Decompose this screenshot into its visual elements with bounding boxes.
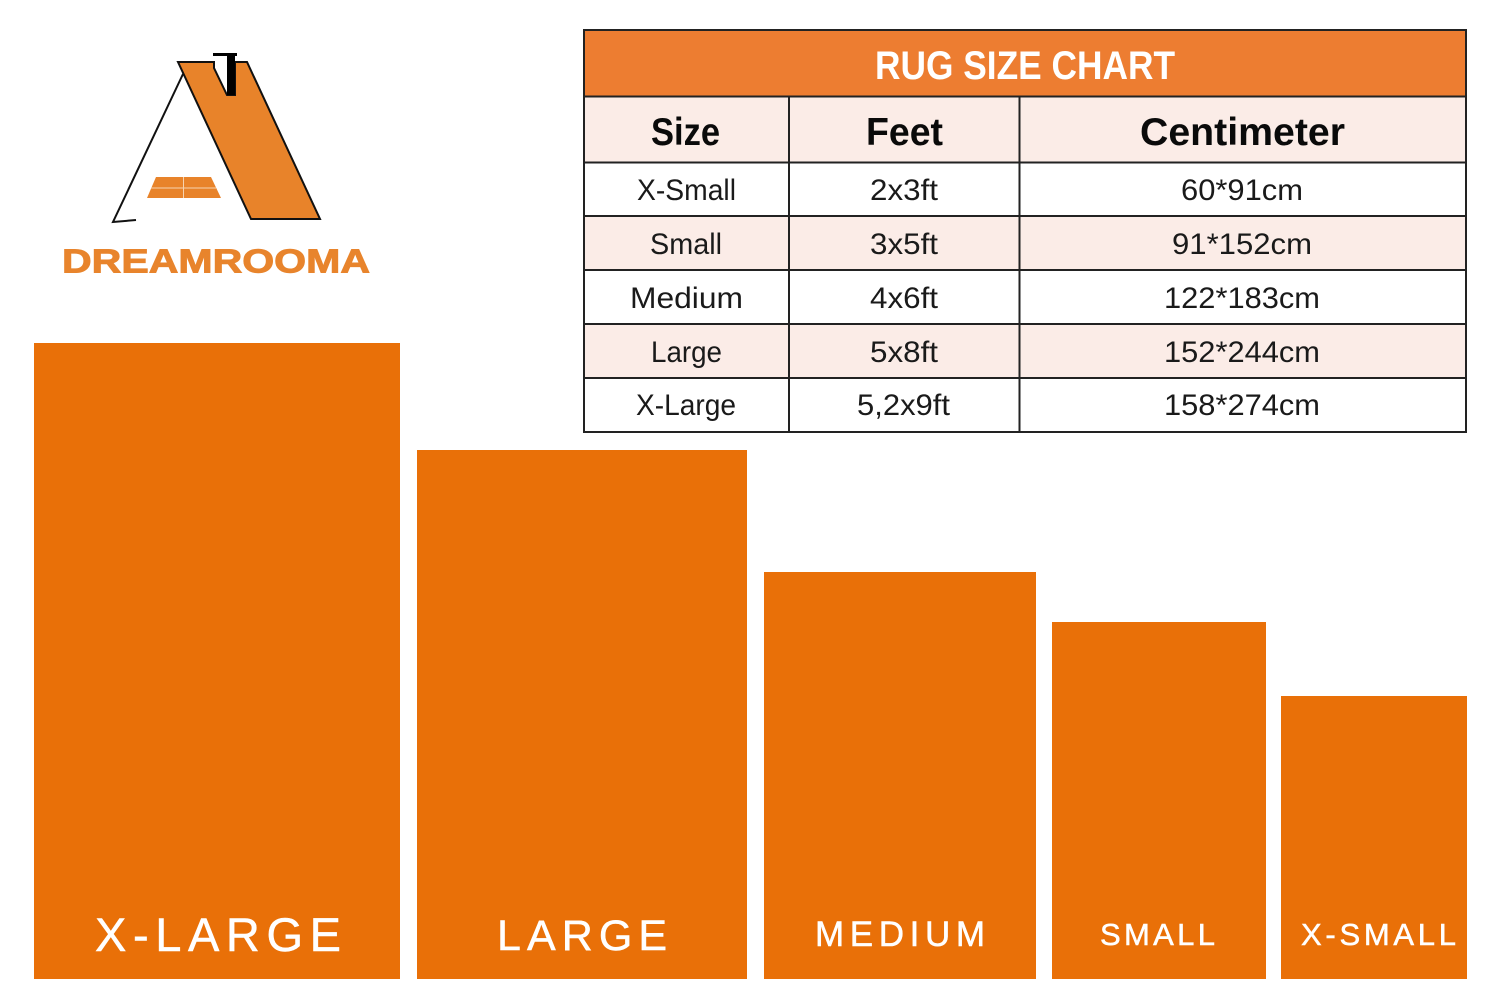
- icon: tent left outline: [113, 74, 183, 222]
- rug: X-Small: [1281, 696, 1467, 979]
- rug: Small: [1052, 622, 1266, 979]
- rug: Large: LARGE: [497, 912, 667, 960]
- brand name: DREAMROOMA: [62, 242, 370, 280]
- row: Small: 3x5ft: [870, 228, 939, 261]
- rug: Large: [417, 450, 747, 979]
- icon: window rug: [147, 177, 221, 198]
- rug: Medium: [764, 572, 1036, 979]
- row: X-Large: 5,2x9ft: [857, 389, 951, 422]
- row: Small: [584, 216, 1466, 270]
- rug: Small: SMALL: [1100, 917, 1215, 952]
- row: Small: Small: [650, 228, 722, 261]
- row: Medium: [584, 270, 1466, 324]
- row: X-Small: X-Small: [637, 174, 736, 207]
- table title: RUG SIZE CHART: [875, 44, 1175, 88]
- row: X-Large: 158*274cm: [1164, 389, 1320, 422]
- row: Small: 91*152cm: [1172, 228, 1312, 261]
- table: rug size chart: [584, 30, 1466, 432]
- row: Medium: Medium: [630, 282, 743, 315]
- row: Large: 5x8ft: [870, 336, 939, 369]
- row: X-Small: 2x3ft: [870, 174, 939, 207]
- icon: roof panel: [178, 62, 320, 219]
- table title: [584, 30, 1466, 96]
- row: X-Large: [584, 378, 1466, 432]
- icon: chimney: [213, 53, 237, 95]
- row: Large: [584, 324, 1466, 378]
- rug: Medium: MEDIUM: [815, 915, 985, 954]
- row: X-Small: 60*91cm: [1181, 174, 1303, 207]
- row: Large: 152*244cm: [1164, 336, 1320, 369]
- rug: X-Large: [34, 343, 400, 979]
- row: Large: Large: [651, 336, 722, 369]
- row: Medium: 4x6ft: [870, 282, 939, 315]
- table header row: Size: [651, 111, 720, 154]
- row: X-Small: [584, 162, 1466, 216]
- table header row: Feet: [866, 111, 943, 154]
- rug: X-Large: X-LARGE: [95, 908, 341, 961]
- row: Medium: 122*183cm: [1164, 282, 1320, 315]
- row: X-Large: X-Large: [636, 389, 736, 422]
- rug: X-Small: X-SMALL: [1301, 917, 1456, 952]
- logo: Dreamrooma: [62, 53, 370, 280]
- table header row: [584, 96, 1466, 162]
- table header row: Centimeter: [1140, 111, 1345, 154]
